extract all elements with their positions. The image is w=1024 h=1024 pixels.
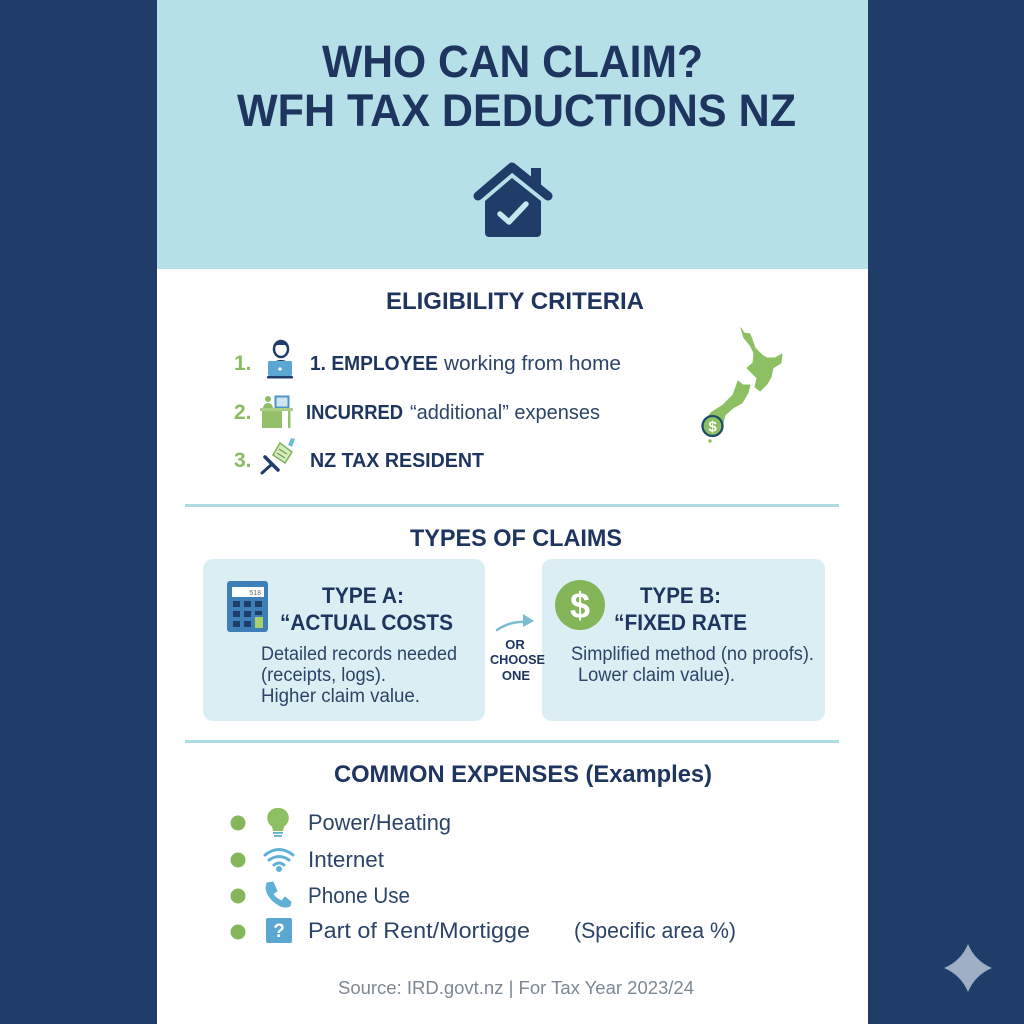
source note: Source: IRD.govt.nz | For Tax Year 2023/24 [338, 978, 694, 998]
icon: dollar coin: $ [570, 585, 590, 626]
expense: internet: Internet [308, 847, 384, 872]
criterion 2: incurred expenses: 2. [234, 401, 252, 424]
eligibility list [234, 341, 621, 473]
heading: eligibility criteria: ELIGIBILITY CRITERIA [386, 288, 644, 315]
expense: phone use: Phone Use [308, 883, 410, 908]
card heading [280, 583, 453, 635]
heading: types of claims: TYPES OF CLAIMS [410, 525, 622, 552]
panel: header [157, 0, 868, 269]
expense: internet [230, 847, 384, 872]
icon: dollar coin [555, 580, 605, 630]
card heading: TYPE A: [322, 583, 404, 608]
white content panel [157, 0, 868, 1024]
card description [571, 644, 814, 686]
connector: or choose one [490, 614, 545, 683]
criterion 3: NZ tax resident: NZ TAX RESIDENT [310, 449, 484, 472]
icon: desk [260, 396, 293, 428]
card description: Simplified method (no proofs). [571, 644, 814, 665]
map: New Zealand with dollar pin: $ [708, 418, 717, 436]
title: WFH TAX DEDUCTIONS NZ [237, 85, 796, 136]
connector: or choose one: OR [505, 637, 525, 652]
criterion 3: NZ tax resident: 3. [234, 449, 252, 472]
criterion 1: employee: 1. EMPLOYEE [310, 352, 438, 375]
heading: common expenses: COMMON EXPENSES (Examples) [334, 761, 712, 788]
card description: Detailed records needed [261, 644, 457, 665]
criterion 3: NZ tax resident [234, 438, 484, 473]
icon: employee with laptop [267, 341, 293, 378]
expense: rent or mortgage: (Specific area %) [574, 918, 736, 943]
panel: type A actual costs [203, 559, 485, 721]
expense: power and heating: Power/Heating [308, 810, 451, 835]
panel: type B fixed rate [542, 559, 825, 721]
icon: question mark [266, 918, 292, 943]
criterion 2: incurred expenses: INCURRED [306, 401, 403, 424]
icon: wifi [265, 850, 293, 870]
card description: Lower claim value). [578, 665, 735, 686]
expenses list [230, 808, 736, 943]
title [237, 36, 796, 136]
icon: question mark: ? [273, 921, 285, 942]
expense: phone use [230, 882, 410, 908]
expense: rent or mortgage [230, 918, 736, 943]
expense: rent or mortgage: Part of Rent/Mortigge [308, 918, 530, 943]
card description: Higher claim value. [261, 686, 420, 707]
criterion 1: employee: 1. [234, 352, 252, 375]
icon: house with check mark [478, 167, 548, 237]
connector: or choose one: CHOOSE [490, 652, 545, 667]
divider [185, 740, 839, 743]
card heading [614, 583, 747, 635]
icon: light bulb [267, 808, 289, 837]
icon: document and squeegee [262, 438, 295, 473]
criterion 2: incurred expenses [234, 396, 600, 428]
card heading: TYPE B: [640, 583, 721, 608]
card heading: “ACTUAL COSTS [280, 610, 453, 635]
connector: or choose one: ONE [502, 668, 530, 683]
icon: phone [266, 882, 291, 907]
map: New Zealand with dollar pin [702, 328, 782, 443]
title: WHO CAN CLAIM? [322, 36, 703, 87]
expense: power and heating [230, 808, 451, 837]
card heading: “FIXED RATE [614, 610, 747, 635]
criterion 1: employee: working from home [443, 352, 621, 375]
icon: calculator: 518 [249, 590, 261, 597]
card description [261, 644, 457, 707]
criterion 1: employee [234, 341, 621, 378]
divider [185, 504, 839, 507]
criterion 2: incurred expenses: “additional” expenses [410, 401, 600, 424]
icon: sparkle [944, 944, 992, 992]
icon: calculator [227, 581, 268, 632]
arrow [497, 614, 534, 630]
card description: (receipts, logs). [261, 665, 386, 686]
